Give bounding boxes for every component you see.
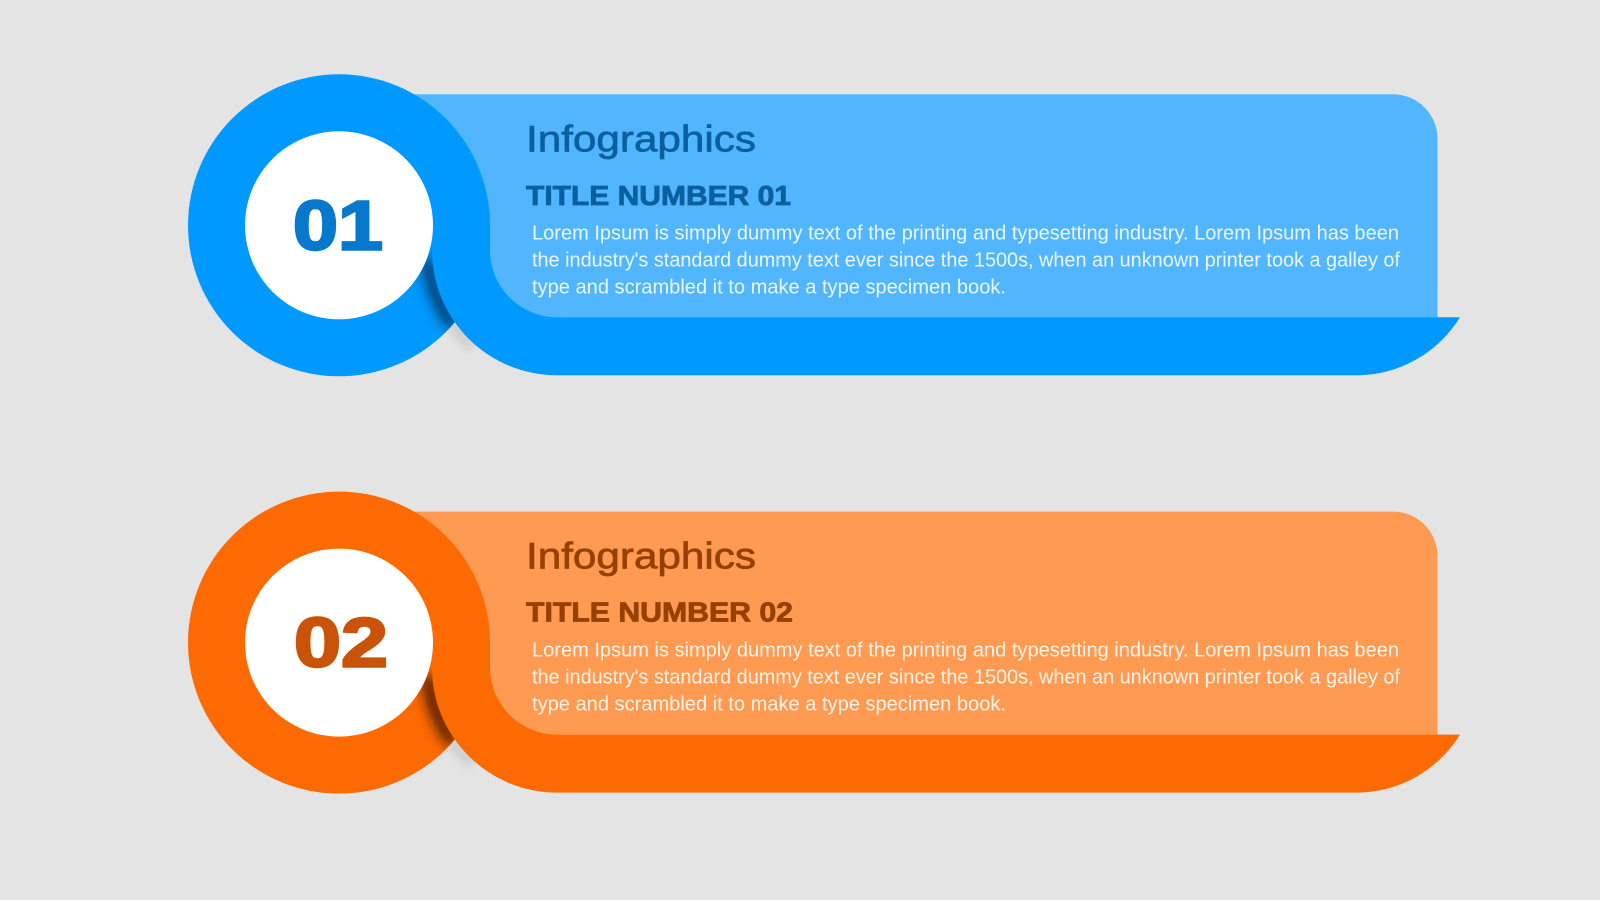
body text: Lorem Ipsum is simply dummy text of the printing and typesetting industry. Lorem Ipsum has been bbox=[532, 640, 1399, 662]
body text: the industry's standard dummy text ever since the 1500s, when an unknown printer took a galley of bbox=[532, 249, 1400, 271]
number ring bbox=[188, 74, 490, 376]
body text: type and scrambled it to make a type specimen book. bbox=[532, 276, 1006, 298]
panel: item 01 bbox=[188, 74, 1460, 376]
ribbon band bbox=[432, 225, 1460, 375]
body text: the industry's standard dummy text ever since the 1500s, when an unknown printer took a galley of bbox=[532, 667, 1400, 689]
soft shadow on background bbox=[450, 320, 472, 346]
body text: Lorem Ipsum is simply dummy text of the printing and typesetting industry. Lorem Ipsum has been bbox=[532, 222, 1399, 244]
fold shadow on ring bbox=[428, 258, 454, 326]
body text: type and scrambled it to make a type specimen book. bbox=[532, 694, 1006, 716]
heading: Infographics bbox=[526, 118, 756, 159]
subtitle: TITLE NUMBER 02 bbox=[526, 597, 793, 628]
white number disc bbox=[245, 131, 433, 319]
body text bbox=[532, 640, 1400, 716]
number ring bbox=[188, 492, 490, 794]
number 01: 01 bbox=[293, 186, 383, 264]
white number disc bbox=[245, 549, 433, 737]
soft shadow on background bbox=[450, 738, 472, 764]
ribbon band bbox=[432, 643, 1460, 793]
light orange content card bbox=[414, 512, 1438, 735]
light blue content card bbox=[414, 94, 1438, 317]
fold shadow on ring bbox=[428, 676, 454, 744]
number 02: 02 bbox=[294, 604, 388, 682]
subtitle: TITLE NUMBER 01 bbox=[526, 180, 791, 211]
panel: item 02 bbox=[188, 492, 1460, 794]
heading: Infographics bbox=[526, 536, 756, 577]
body text bbox=[532, 222, 1400, 298]
